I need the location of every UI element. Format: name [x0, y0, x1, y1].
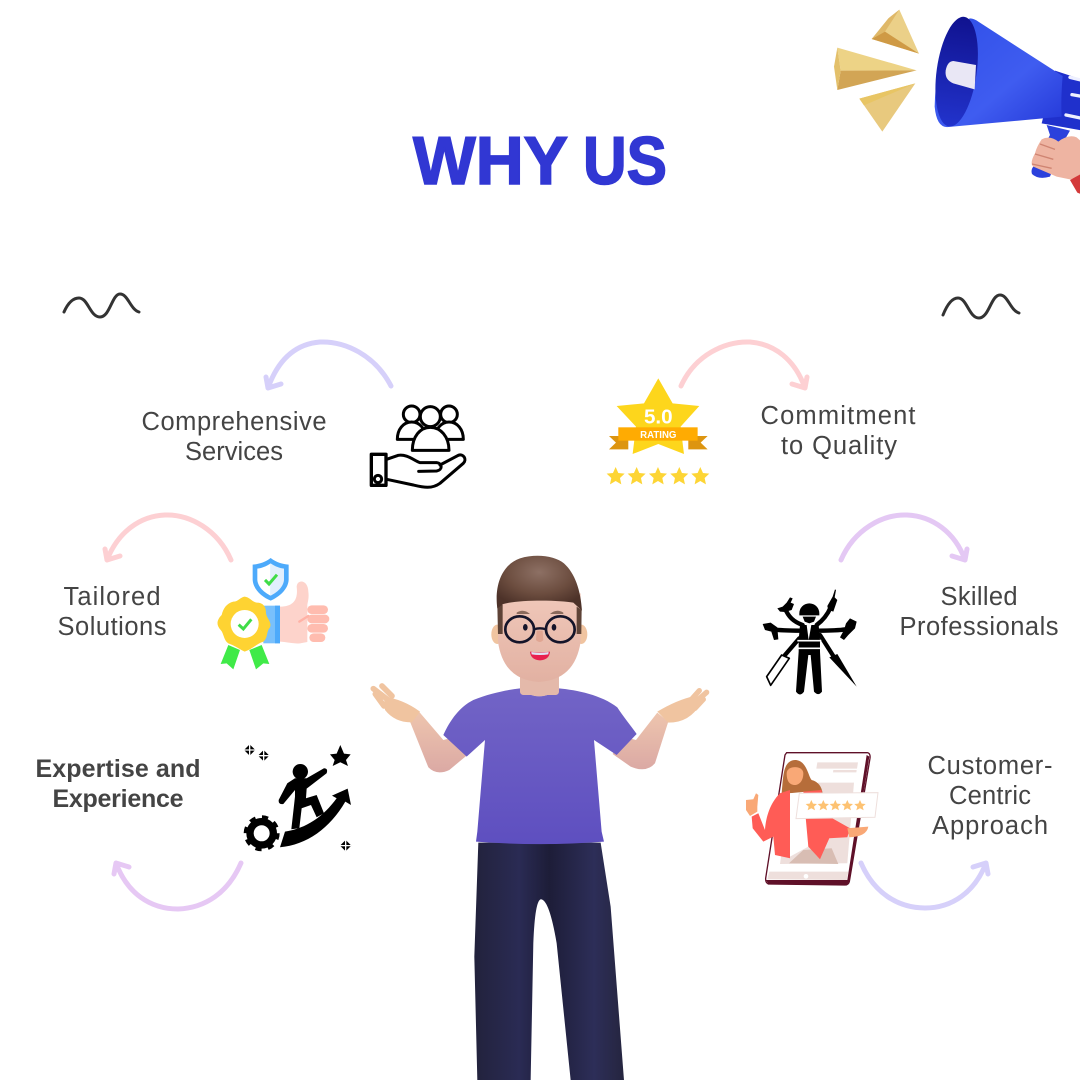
text: Tailored Solutions	[58, 583, 166, 641]
arrow: comprehensive	[266, 342, 391, 388]
icon: 5.0 rating star: 5.0	[644, 405, 673, 428]
icon: megaphone with hand	[929, 14, 1080, 195]
title	[413, 123, 667, 199]
text: Commitment to Quality: Commitment	[760, 402, 916, 430]
icon: hand holding people	[371, 406, 465, 487]
text: Customer-Centric Approach: Customer-	[928, 752, 1052, 780]
text: Customer-Centric Approach	[928, 752, 1052, 840]
text: Comprehensive Services	[142, 408, 326, 466]
text: Comprehensive Services: Comprehensive	[142, 408, 326, 436]
character trousers	[474, 843, 624, 1080]
text: Expertise and Experience	[36, 755, 200, 813]
text: Customer-Centric Approach: Centric	[949, 782, 1031, 810]
icon: climbing person with gear and star	[244, 744, 351, 851]
text: Comprehensive Services: Services	[185, 438, 283, 466]
text: Expertise and Experience: Experience	[52, 785, 184, 813]
icon: multi-armed skilled worker	[763, 589, 857, 694]
icon: phone with reviewer woman	[746, 753, 878, 885]
squiggle right	[943, 295, 1019, 318]
arrow: customer	[861, 863, 988, 908]
arrow: tailored	[105, 515, 231, 560]
text: Customer-Centric Approach: Approach	[932, 812, 1048, 840]
arrow: expertise	[114, 863, 241, 909]
text: Skilled Professionals: Professionals	[900, 613, 1058, 641]
central 3D character	[373, 556, 707, 1080]
arrow: commitment	[681, 342, 807, 388]
icon: 5.0 rating star	[607, 378, 709, 484]
text: Skilled Professionals	[900, 583, 1058, 641]
icon: golden sound triangles	[834, 10, 919, 132]
title: US	[583, 123, 667, 199]
text: Commitment to Quality	[760, 402, 916, 460]
text: Commitment to Quality: to Quality	[781, 432, 897, 460]
character shirt	[443, 688, 637, 844]
text: Skilled Professionals: Skilled	[940, 583, 1018, 611]
character head	[491, 556, 587, 696]
character arms	[373, 686, 707, 772]
squiggle left	[64, 294, 139, 317]
icon: 5.0 rating star: RATING	[640, 430, 676, 441]
arrow: skilled	[841, 515, 967, 560]
title: WHY	[413, 123, 568, 199]
text: Tailored Solutions: Tailored	[64, 583, 160, 611]
text: Tailored Solutions: Solutions	[58, 613, 166, 641]
icon: medal, shield and thumbs up	[218, 558, 329, 669]
text: Expertise and Experience: Expertise and	[36, 755, 200, 783]
